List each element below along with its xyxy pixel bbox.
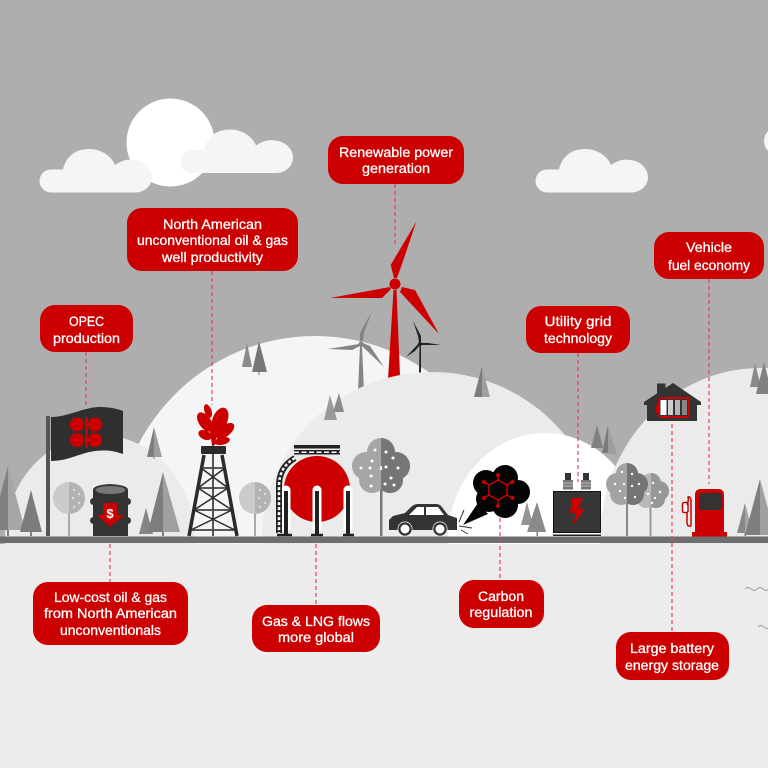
leafy tree right back [636, 473, 669, 536]
wind turbine red [330, 222, 439, 379]
hill: middle grey [262, 372, 602, 708]
dashed connectors [86, 184, 709, 632]
callout: gas and LNG flows: more global [278, 629, 354, 645]
cloud left [40, 149, 152, 192]
conifer trees [0, 341, 768, 536]
callout: low-cost oil and gas [33, 582, 188, 645]
callout: OPEC production: OPEC [69, 313, 104, 329]
sun [126, 98, 214, 186]
callout: renewable power generation: Renewable power [339, 144, 453, 160]
wind turbine dark [406, 321, 441, 375]
callout: gas and LNG flows [252, 605, 380, 652]
oil barrel [90, 484, 131, 536]
hill: left grey [5, 435, 195, 645]
callout: renewable power generation [328, 136, 464, 184]
callout: OPEC production: production [53, 330, 120, 346]
lollipop tree left [53, 482, 85, 536]
ground [0, 544, 768, 768]
callout: well productivity: well productivity [161, 249, 263, 265]
callout: low-cost oil and gas: Low-cost oil & gas [54, 589, 167, 605]
callout: low-cost oil and gas: unconventionals [60, 622, 161, 638]
cloud right [536, 149, 648, 192]
callout: OPEC production [40, 305, 133, 352]
house with battery [644, 383, 701, 421]
lollipop tree centre [239, 482, 271, 536]
callout: carbon regulation: regulation [470, 604, 532, 620]
callout: large battery energy storage: Large battery [630, 640, 714, 656]
oil derrick [189, 438, 237, 536]
callout: vehicle fuel economy [654, 232, 764, 279]
leafy tree right front [606, 463, 648, 536]
callout: well productivity: North American [163, 216, 262, 232]
oil gusher [194, 403, 237, 446]
cloud centre [181, 130, 293, 173]
gas storage sphere [277, 445, 354, 535]
transformer [553, 473, 601, 536]
hill: right grey [600, 368, 768, 712]
hill: large white [115, 336, 515, 744]
callout: vehicle fuel economy: fuel economy [668, 257, 750, 273]
car [389, 504, 457, 536]
callout: well productivity [127, 208, 298, 271]
callout: utility grid technology [526, 306, 630, 353]
flag: OPEC [46, 407, 123, 536]
fuel pump [682, 489, 727, 536]
callout: utility grid technology: Utility grid [544, 313, 612, 329]
callout: large battery energy storage [616, 632, 729, 680]
callout: carbon regulation [459, 580, 544, 628]
hill: white right [448, 433, 642, 647]
exhaust smoke with carbon molecule [459, 465, 530, 534]
callout: well productivity: unconventional oil & gas [137, 232, 288, 248]
callout: vehicle fuel economy: Vehicle [686, 239, 732, 255]
callout: large battery energy storage: energy storage [625, 657, 719, 673]
oil barrel: $ [106, 506, 114, 521]
leafy tree centre [352, 438, 410, 536]
road [0, 536, 768, 543]
callout: carbon regulation: Carbon [478, 588, 524, 604]
callout: utility grid technology: technology [544, 330, 612, 346]
callout: low-cost oil and gas: from North American [44, 605, 177, 621]
sky [0, 0, 768, 545]
cloud edge [764, 127, 768, 155]
callout: renewable power generation: generation [362, 160, 430, 176]
wind turbine grey [328, 311, 384, 392]
waves [745, 588, 768, 628]
callout: gas and LNG flows: Gas & LNG flows [262, 613, 370, 629]
